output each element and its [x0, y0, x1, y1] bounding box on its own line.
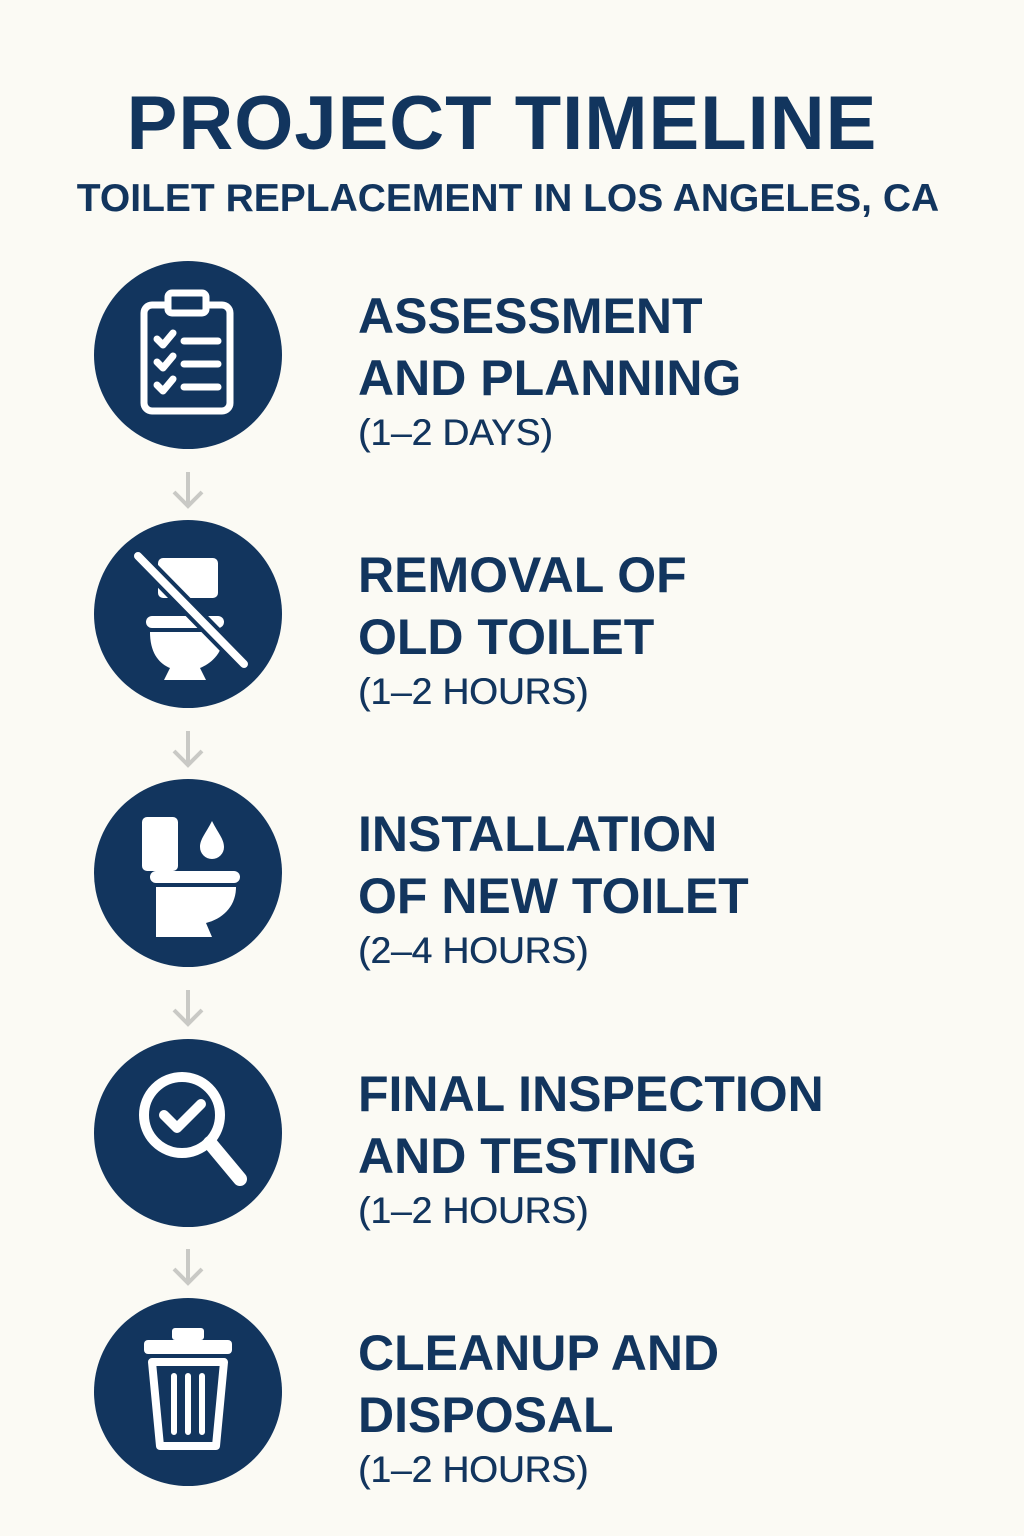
- text: [358, 1066, 824, 1231]
- step 4: inspection: [94, 1039, 824, 1231]
- text: DISPOSAL: [358, 1387, 614, 1443]
- arrow: [172, 731, 204, 768]
- text: (1–2 HOURS): [358, 671, 588, 712]
- text: INSTALLATION: [358, 806, 717, 862]
- icon: crossed toilet: [94, 520, 282, 708]
- title: PROJECT TIMELINE: [127, 81, 877, 166]
- icon: magnifier check: [94, 1039, 282, 1227]
- arrow: [172, 1249, 204, 1286]
- text: (1–2 HOURS): [358, 1449, 588, 1490]
- text: (1–2 HOURS): [358, 1190, 588, 1231]
- step 3: installation: [94, 779, 749, 971]
- text: [358, 547, 687, 712]
- text: [358, 806, 749, 971]
- text: (1–2 DAYS): [358, 412, 553, 453]
- text: AND PLANNING: [358, 350, 741, 406]
- text: [358, 1325, 719, 1490]
- icon: trash can: [94, 1298, 282, 1486]
- arrow: [172, 472, 204, 509]
- text: (2–4 HOURS): [358, 930, 588, 971]
- step 5: cleanup: [94, 1298, 719, 1490]
- arrow: [172, 990, 204, 1027]
- text: ASSESSMENT: [358, 288, 703, 344]
- text: AND TESTING: [358, 1128, 697, 1184]
- step 1: assessment: [94, 261, 741, 453]
- text: FINAL INSPECTION: [358, 1066, 824, 1122]
- text: [358, 288, 741, 453]
- text: CLEANUP AND: [358, 1325, 719, 1381]
- text: OLD TOILET: [358, 609, 654, 665]
- text: REMOVAL OF: [358, 547, 687, 603]
- step 2: removal: [94, 520, 687, 712]
- subtitle: TOILET REPLACEMENT IN LOS ANGELES, CA: [77, 177, 939, 220]
- text: OF NEW TOILET: [358, 868, 749, 924]
- icon: toilet with drop: [94, 779, 282, 967]
- icon: clipboard: [94, 261, 282, 449]
